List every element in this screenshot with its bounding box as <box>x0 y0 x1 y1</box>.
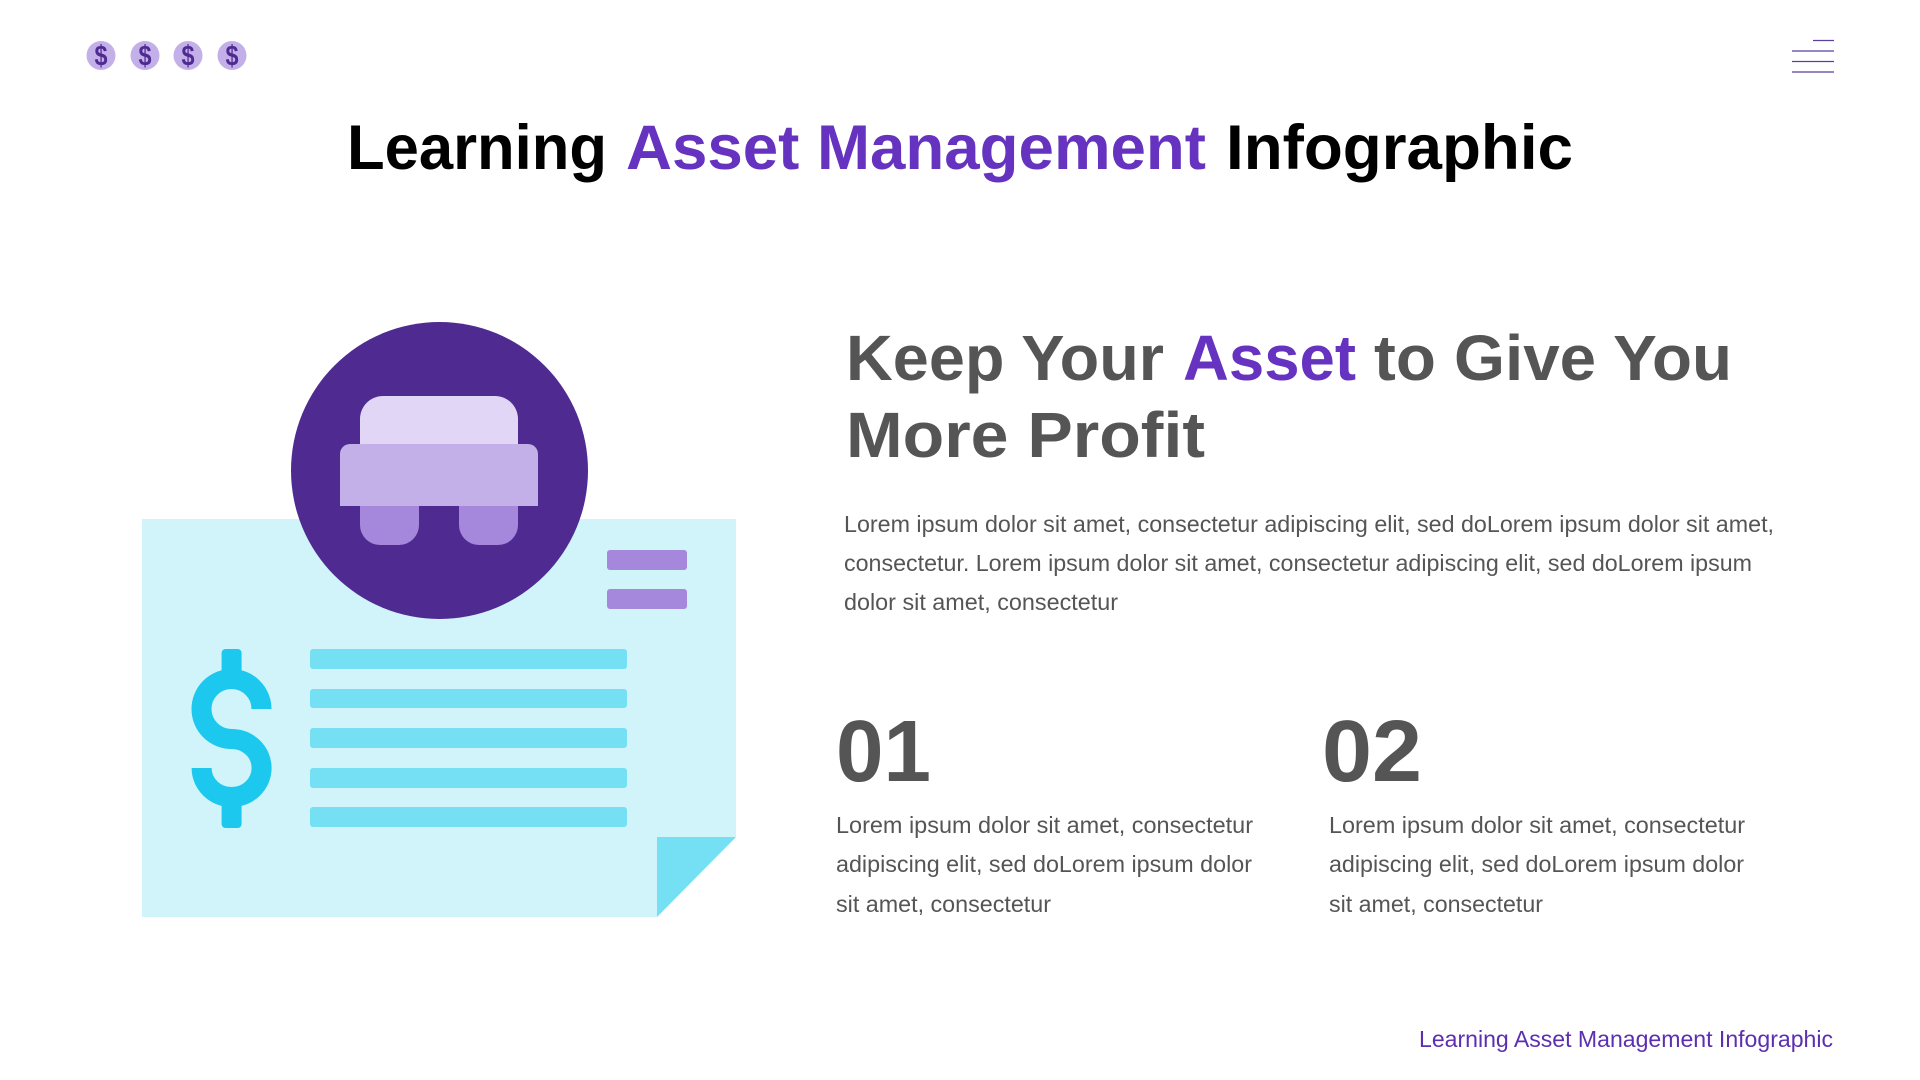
heading: Keep Your <box>846 322 1164 394</box>
heading: More Profit <box>846 399 1205 471</box>
title <box>347 113 1573 183</box>
footer label: Learning Asset Management Infographic <box>1419 1026 1833 1052</box>
paper sheet <box>142 519 736 917</box>
row of dollar coin icons: $ <box>94 40 108 72</box>
item 01 text: adipiscing elit, sed doLorem ipsum dolor <box>836 851 1252 877</box>
small purple bars <box>607 550 687 609</box>
number 01: 01 <box>836 703 931 800</box>
item 02 text: sit amet, consectetur <box>1329 891 1543 917</box>
intro paragraph <box>844 511 1774 615</box>
item 01 text: sit amet, consectetur <box>836 891 1051 917</box>
item 02 text <box>1329 812 1745 917</box>
title: Asset Management <box>626 113 1206 183</box>
icon: car <box>340 396 538 545</box>
item 02 text: Lorem ipsum dolor sit amet, consectetur <box>1329 812 1745 838</box>
item 02 <box>1322 703 1745 917</box>
item 01 text: Lorem ipsum dolor sit amet, consectetur <box>836 812 1253 838</box>
icon: menu lines <box>1792 40 1834 72</box>
heading: Asset <box>1183 322 1356 394</box>
intro paragraph: dolor sit amet, consectetur <box>844 589 1118 615</box>
item 02 text: adipiscing elit, sed doLorem ipsum dolor <box>1329 851 1744 877</box>
icon: dollar sign <box>202 649 262 828</box>
number 02: 02 <box>1322 703 1422 800</box>
item 01 text <box>836 812 1253 917</box>
heading: to Give You <box>1374 322 1732 394</box>
row of dollar coin icons: $ <box>226 40 238 72</box>
intro paragraph: consectetur. Lorem ipsum dolor sit amet, consectetur adipiscing elit, sed doLorem ipsum <box>844 550 1752 576</box>
purple circle badge <box>291 322 588 619</box>
intro paragraph: Lorem ipsum dolor sit amet, consectetur adipiscing elit, sed doLorem ipsum dolor sit amet, <box>844 511 1774 537</box>
row of dollar coin icons <box>86 40 246 72</box>
text lines on paper <box>310 649 627 827</box>
item 01 <box>836 703 1253 917</box>
paper folded corner <box>657 837 736 917</box>
illustration: document with car badge <box>142 322 736 917</box>
row of dollar coin icons: $ <box>138 40 152 72</box>
heading <box>846 322 1732 471</box>
title: Infographic <box>1226 113 1573 183</box>
title: Learning <box>347 113 607 183</box>
row of dollar coin icons: $ <box>182 40 194 72</box>
